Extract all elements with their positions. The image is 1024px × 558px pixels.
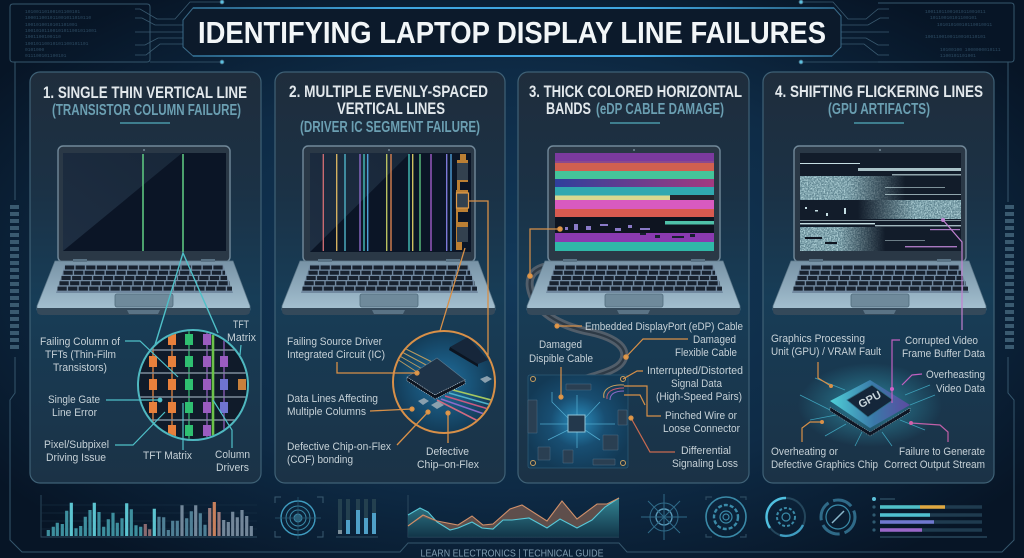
callout: failure to generate: Failure to Generate: [899, 446, 985, 458]
heading: [289, 83, 488, 136]
callout: failing column: [40, 336, 121, 374]
callout: failing column: Failing Column of: [40, 336, 121, 348]
binary block: top right: [925, 9, 1001, 59]
callout leaders: [337, 201, 488, 445]
callout: pinched wire: Pinched Wire or: [665, 410, 737, 422]
decoration: left side stripes: [10, 207, 19, 347]
GPU chip illustration: [798, 363, 942, 447]
callout: differential signaling: Differential: [681, 445, 731, 457]
heading: 3. THICK COLORED HORIZONTAL: [529, 83, 742, 101]
callout: data lines: Multiple Columns: [287, 406, 366, 418]
binary block: top left: 10100110100101100101: [25, 9, 80, 15]
eDP cable: [530, 266, 624, 384]
callout: failure to generate: [884, 446, 985, 471]
callout: pixel driving issue: [44, 439, 109, 464]
callout: damaged flexible cable: [675, 334, 737, 359]
laptop with noisy GPU artifacts: [773, 146, 986, 315]
heading: [529, 83, 742, 123]
callout: TFT matrix top: [227, 319, 256, 344]
callout: single gate line error: [48, 394, 100, 419]
callout: data lines: Data Lines Affecting: [287, 393, 378, 405]
panel: 4 shifting flickering lines: [763, 72, 994, 483]
callout: overheating chip: Overheating or: [771, 446, 838, 458]
callout: defective chip-on-flex: [417, 446, 479, 471]
heading: (eDP CABLE DAMAGE): [596, 101, 724, 118]
callout: corrupted video: [902, 335, 986, 360]
decoration: right side stripes: [1005, 207, 1014, 347]
callout: column drivers: Drivers: [216, 462, 249, 474]
callout: pinched wire: Loose Connector: [663, 423, 740, 435]
callout: overheasting video: [926, 369, 986, 395]
circuit traces: left of title: [135, 0, 224, 64]
icon: gear 1: [706, 497, 746, 537]
callout: failing source driver: Failing Source Driver: [287, 336, 382, 348]
callout: TFT matrix bottom: TFT Matrix: [143, 450, 192, 462]
callout: overheasting video: Overheasting: [926, 369, 985, 381]
binary block: top left: 1001010010101101001: [25, 22, 78, 28]
callout: COF bonding: Defective Chip-on-Flex: [287, 441, 391, 453]
callout: interrupted signal: Signal Data: [671, 378, 723, 390]
callout: GPU VRAM fault: Unit (GPU) / VRAM Fault: [771, 346, 881, 358]
heading: (DRIVER IC SEGMENT FAILURE): [300, 119, 480, 136]
callout: COF bonding: (COF) bonding: [287, 454, 353, 466]
heading: [43, 84, 247, 123]
GPU label: GPU: [857, 389, 883, 411]
panel: 2 multiple evenly-spaced vertical lines: [275, 72, 505, 483]
callout: interrupted signal: [647, 365, 743, 403]
binary block: top right: 1100101101001: [940, 53, 976, 59]
circuit traces: right of title: [799, 0, 889, 64]
icon: gauge: [821, 500, 855, 534]
callout: TFT matrix top: Matrix: [227, 332, 256, 344]
binary block: top left: 100011001011001011010110: [25, 15, 91, 21]
callout: overheating chip: [771, 446, 878, 471]
binary block: top right: 10101010010110010011: [937, 22, 992, 28]
callout leaders: [528, 227, 688, 452]
area line chart: [408, 495, 619, 537]
callout: overheasting video: Video Data: [936, 383, 986, 395]
callout leaders: [106, 341, 241, 450]
binary block: top right: 10100100 1000000010111: [940, 47, 1001, 53]
callout: failing source driver: [287, 336, 385, 361]
small bar chart: [336, 499, 378, 537]
PCB board: [528, 375, 628, 468]
heading: 2. MULTIPLE EVENLY-SPACED: [289, 83, 488, 101]
magnifier: driver IC: [393, 331, 495, 433]
icon: compass: [641, 494, 687, 540]
callout: data lines: [287, 393, 378, 418]
callout: failing column: TFTs (Thin-Film: [45, 349, 116, 361]
callout: pixel driving issue: Driving Issue: [46, 452, 106, 464]
heading: VERTICAL LINES: [337, 100, 445, 118]
heading: (GPU ARTIFACTS): [828, 101, 930, 118]
icon: gear 2 with bright arc: [766, 498, 805, 536]
callout: corrupted video: Corrupted Video: [905, 335, 978, 347]
laptop with two green lines: [37, 146, 250, 315]
callout: TFT matrix top: TFT: [233, 319, 249, 331]
magnifier beam: [155, 253, 218, 345]
callout: corrupted video: Frame Buffer Data: [902, 348, 986, 360]
callout: overheating chip: Defective Graphics Chip: [771, 459, 878, 471]
callout: interrupted signal: (High-Speed Pairs): [656, 391, 742, 403]
panel: 3 thick coloured horizontal bands: [518, 72, 749, 483]
callout: damaged dispible cable: Damaged: [539, 339, 582, 351]
callout: failure to generate: Correct Output Stream: [884, 459, 985, 471]
binary block: top left: 10010110010101100101101: [25, 41, 89, 47]
callout: GPU VRAM fault: Graphics Processing: [771, 333, 865, 345]
title banner: [183, 8, 841, 56]
laptop with coloured bands: [527, 146, 740, 315]
callout: pinched wire: [663, 410, 740, 435]
callout: damaged dispible cable: [529, 339, 593, 365]
magnifier: TFT matrix: [135, 330, 250, 440]
callout: interrupted signal: Interrupted/Distorted: [647, 365, 743, 377]
callout: damaged dispible cable: Dispible Cable: [529, 353, 593, 365]
binary block: top right: 1001101100101011001011: [925, 9, 986, 15]
heading: BANDS: [546, 100, 591, 118]
heading: [775, 83, 983, 123]
binary block: top right: 1001100100110010110101: [925, 34, 986, 40]
radar dial: [275, 497, 323, 539]
callout: single gate line error: Line Error: [52, 407, 97, 419]
binary block: top left: 10010101100101011001011001: [25, 28, 97, 34]
callout: single gate line error: Single Gate: [48, 394, 100, 406]
callout: damaged flexible cable: Damaged: [693, 334, 736, 346]
callout: failing column: Transistors): [53, 362, 107, 374]
callout: damaged flexible cable: Flexible Cable: [675, 347, 737, 359]
callout: defective chip-on-flex: Defective: [426, 446, 469, 458]
callout: COF bonding: [287, 441, 391, 466]
bar chart: bottom left: [41, 495, 257, 537]
heading: (TRANSISTOR COLUMN FAILURE): [52, 102, 241, 119]
heading: 1. SINGLE THIN VERTICAL LINE: [43, 84, 247, 102]
binary block: top right: 10110010101100101: [930, 15, 977, 21]
callout: eDP cable: Embedded DisplayPort (eDP) Cable: [585, 321, 743, 333]
callout: GPU VRAM fault: [771, 333, 881, 358]
callout: pixel driving issue: Pixel/Subpixel: [44, 439, 109, 451]
binary block: top left: [25, 9, 97, 59]
callout: column drivers: [215, 449, 250, 474]
callout: defective chip-on-flex: Chip–on-Flex: [417, 459, 479, 471]
laptop with multiple coloured lines and driver strip: [282, 146, 495, 315]
callout: differential signaling: [672, 445, 738, 470]
binary block: top left: 011100101100101: [25, 53, 67, 59]
binary block: top left: 0101000: [25, 47, 45, 53]
callout leaders: [802, 218, 962, 442]
title: IDENTIFYING LAPTOP DISPLAY LINE FAILURES: [198, 16, 826, 50]
horizontal progress bars: [872, 497, 987, 537]
panel: 1 single thin vertical line: [30, 72, 261, 483]
callout: column drivers: Column: [215, 449, 250, 461]
callout: failing source driver: Integrated Circuit (IC): [287, 349, 385, 361]
callout: differential signaling: Signaling Loss: [672, 458, 738, 470]
heading: 4. SHIFTING FLICKERING LINES: [775, 83, 983, 101]
binary block: top left: 1001100100110: [25, 34, 61, 40]
